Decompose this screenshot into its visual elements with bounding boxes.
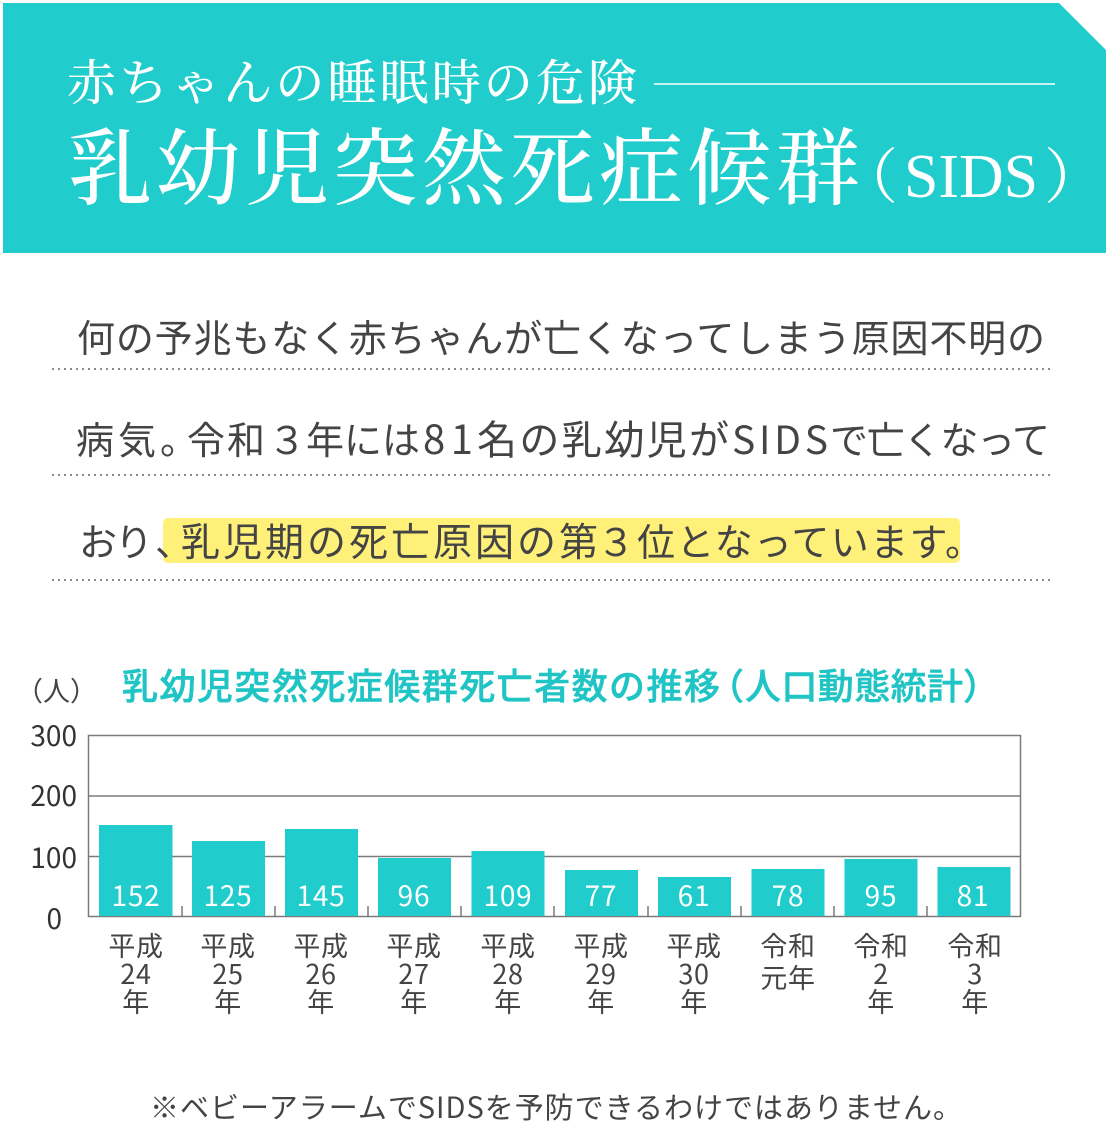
line 2 xyxy=(76,408,1050,466)
y axis labels: 100 xyxy=(30,837,77,877)
highlight xyxy=(163,518,960,563)
line 3: おり xyxy=(79,512,153,567)
bar values: 109 xyxy=(483,875,533,915)
unit label: （人） xyxy=(16,670,97,709)
line 2: SIDS xyxy=(732,410,828,466)
x axis labels: 26 xyxy=(305,953,337,992)
x axis labels: 年 xyxy=(680,981,708,1020)
x axis labels: 年 xyxy=(961,981,989,1020)
line 2: 令和 xyxy=(187,410,265,465)
bar values: 96 xyxy=(398,875,430,915)
x axis labels: 30 xyxy=(678,953,710,992)
bar values: 81 xyxy=(957,875,989,915)
line 2: 病気 xyxy=(76,410,156,465)
x axis labels: 24 xyxy=(120,953,152,992)
bar values: 125 xyxy=(203,875,253,915)
x axis labels: 平成 xyxy=(666,925,722,964)
bar values: 95 xyxy=(865,875,897,915)
chart title xyxy=(122,658,999,710)
x axis labels: 年 xyxy=(494,981,522,1020)
body text xyxy=(52,308,1053,580)
bar values: 77 xyxy=(585,875,617,915)
x axis labels: 平成 xyxy=(200,925,256,964)
line 3: 位となっています。 xyxy=(637,512,983,567)
x axis labels: 年 xyxy=(307,981,335,1020)
x axis labels: 2 xyxy=(873,953,889,992)
bar values: 78 xyxy=(772,875,804,915)
x axis labels: 平成 xyxy=(573,925,629,964)
x axis labels: 令和 xyxy=(853,925,909,964)
bar values: 152 xyxy=(111,875,161,915)
header title abbreviation: ） xyxy=(1044,130,1104,216)
header subtitle: 赤ちゃんの睡眠時の危険 xyxy=(67,45,637,115)
x axis labels: 年 xyxy=(400,981,428,1020)
x axis labels: 令和 xyxy=(947,925,1003,964)
header title: 乳幼児突然死症候群 xyxy=(68,102,860,223)
chart title: ） xyxy=(963,658,999,710)
x axis labels: 平成 xyxy=(108,925,164,964)
x axis labels: 年 xyxy=(214,981,242,1020)
bar values: 145 xyxy=(296,875,346,915)
line 3: 、 xyxy=(155,512,193,567)
x axis labels: 年 xyxy=(587,981,615,1020)
line 2: 81 xyxy=(423,408,473,466)
line 2: 年には xyxy=(306,410,420,465)
chart title: 乳幼児突然死症候群死亡者数の推移 xyxy=(122,658,720,710)
line 2: ３ xyxy=(268,410,306,465)
line 3: 乳児期の死亡原因の第 xyxy=(181,512,598,568)
chart title: （ xyxy=(708,658,744,710)
x axis labels: 平成 xyxy=(386,925,442,964)
plot frame xyxy=(88,736,1020,916)
x axis labels: 29 xyxy=(585,953,617,992)
header title abbreviation xyxy=(838,130,1104,216)
line 2: 名の乳幼児が xyxy=(477,408,729,466)
line 2: 。 xyxy=(160,410,198,465)
y axis labels: 0 xyxy=(46,898,62,938)
x axis labels: 年 xyxy=(122,981,150,1020)
bar values xyxy=(111,875,989,915)
header banner xyxy=(3,3,1106,253)
line 2: で亡くなって xyxy=(830,410,1050,465)
y axis labels: 300 xyxy=(30,715,77,755)
x axis labels: 令和 xyxy=(760,925,816,964)
chart title: 人口動態統計 xyxy=(745,658,963,710)
x axis labels: 元年 xyxy=(760,957,816,996)
chart xyxy=(16,658,1020,1020)
x axis labels: 25 xyxy=(212,953,244,992)
line 3 xyxy=(79,512,983,568)
x axis labels: 28 xyxy=(492,953,524,992)
x axis labels: 平成 xyxy=(480,925,536,964)
x axis labels: 平成 xyxy=(293,925,349,964)
x axis labels: 27 xyxy=(398,953,430,992)
y axis labels: 200 xyxy=(30,775,77,815)
y axis labels xyxy=(30,715,77,938)
line 1: 何の予兆もなく赤ちゃんが亡くなってしまう原因不明の xyxy=(77,308,1045,363)
header title abbreviation: （ xyxy=(838,130,898,216)
x axis labels: 3 xyxy=(967,953,983,992)
header title abbreviation: SIDS xyxy=(904,143,1038,211)
bars xyxy=(99,825,1010,916)
line 3: ３ xyxy=(597,512,635,567)
bar values: 61 xyxy=(678,875,710,915)
x axis labels xyxy=(108,925,1003,1020)
x axis labels: 年 xyxy=(867,981,895,1020)
